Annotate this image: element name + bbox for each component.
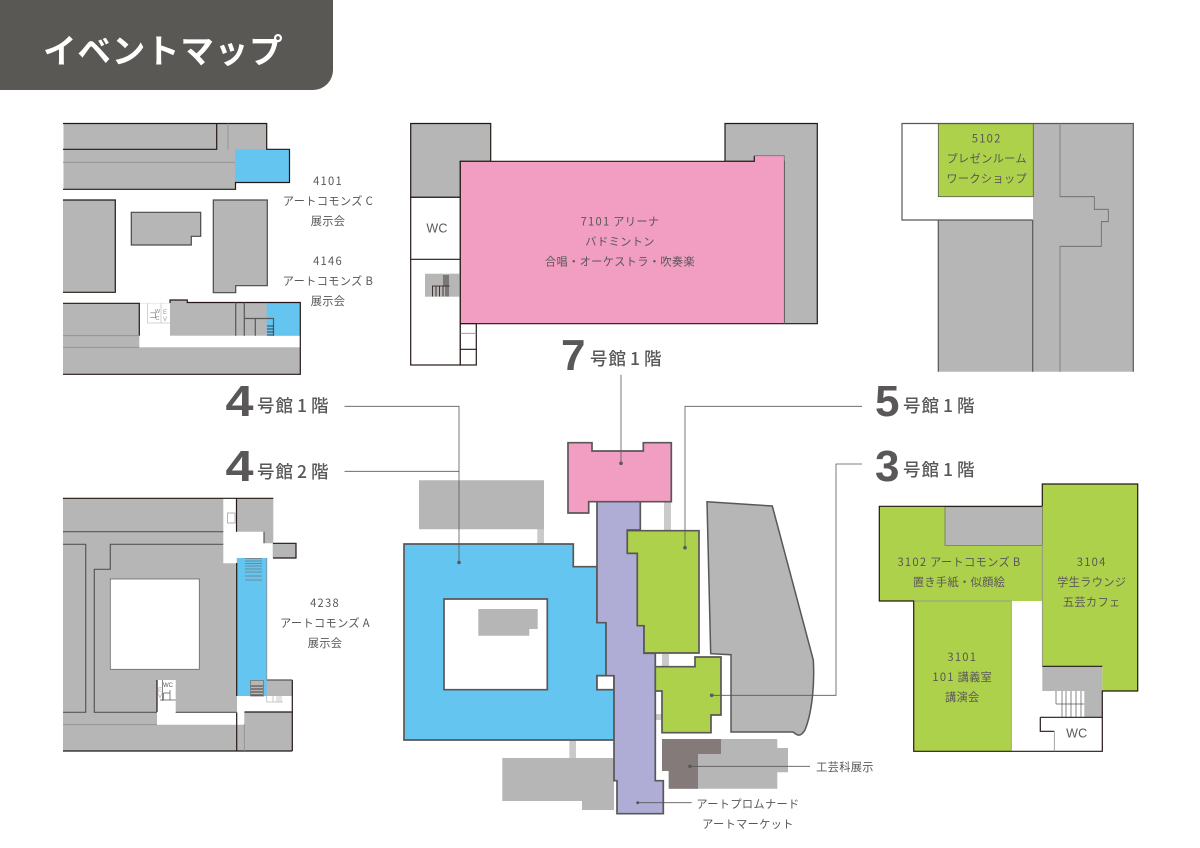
room labels: 4101 and 4146: 展示会 [311, 293, 345, 309]
room label: 5102 [946, 130, 1027, 186]
purple promenade [597, 502, 663, 814]
leader line: building 4 [344, 406, 461, 564]
floor plan: building 4 floor 1: V [163, 317, 167, 323]
room label: 3102: 3102 アートコモンズ B [897, 554, 1021, 570]
floor plan: building 4 floor 2 [63, 498, 296, 751]
room labels: 4101 and 4146: アートコモンズ C [283, 193, 373, 209]
room label: 3102: 置き手紙・似顔絵 [913, 574, 1005, 590]
room label: 4238: 4238 [310, 595, 340, 611]
callout: craft exhibit: 工芸科展示 [816, 759, 874, 775]
room labels: 4101 and 4146 [283, 173, 373, 309]
floor plan: building 4 floor 1 [63, 124, 300, 374]
room labels: 4101 and 4146: 4101 [313, 173, 343, 189]
heading: building 5 floor 1 [875, 377, 975, 426]
heading: building 7 floor 1: 号館1階 [590, 346, 662, 371]
room label: 3101 [932, 649, 992, 705]
callout: craft exhibit [688, 759, 874, 775]
heading: building 5 floor 1: 号館1階 [903, 393, 975, 418]
heading: building 4 floor 2 [226, 442, 329, 491]
floor plan: building 4 floor 1: C [156, 316, 160, 322]
room label: 3101: 101 講義室 [932, 669, 992, 685]
room label: 5102: 5102 [972, 130, 1002, 146]
floor plan: building 4 floor 1: W [155, 309, 161, 315]
room label: 3104 [1057, 554, 1126, 610]
pink building 7 [568, 443, 671, 513]
room labels: 4101 and 4146: 展示会 [311, 213, 345, 229]
heading: building 4 floor 1: 4 [226, 377, 254, 426]
room label: 3101: 3101 [947, 649, 977, 665]
floor plan: building 4 floor 2: E [158, 688, 162, 694]
green building 3 [655, 657, 721, 733]
title banner [0, 0, 333, 90]
floor plan: building 4 floor 1: E [163, 310, 167, 316]
room labels: 4101 and 4146: アートコモンズ B [283, 273, 373, 289]
room labels: 4101 and 4146: 4146 [313, 253, 343, 269]
room label: 5102: プレゼンルーム [946, 150, 1027, 166]
floor plan: building 3 floor 1 [879, 484, 1138, 751]
craft exhibit area [662, 739, 721, 789]
room label: 7101: 7101 アリーナ [581, 214, 659, 230]
campus site map [404, 443, 814, 814]
room label: 4238: 展示会 [308, 635, 342, 651]
room label: 3104: 五芸カフェ [1063, 594, 1121, 610]
title banner: イベントマップ [43, 24, 283, 73]
blue building 4 [404, 544, 614, 740]
heading: building 3 floor 1 [875, 442, 975, 491]
floor plan: building 7 floor 1: WC [426, 222, 448, 236]
heading: building 4 floor 2: 4 [226, 442, 254, 491]
room label: 7101: 合唱・オーケストラ・吹奏楽 [545, 254, 695, 270]
callout: art promenade: アートプロムナード [696, 796, 800, 812]
floor plan: building 3 floor 1: WC [1066, 726, 1087, 740]
room label: 4238 [280, 595, 370, 651]
floor plan: building 4 floor 1: コ [149, 311, 157, 320]
heading: building 3 floor 1: 3 [875, 442, 899, 491]
leader line: building 7 [619, 375, 623, 465]
surrounding grey buildings [419, 480, 788, 810]
green building 5 [627, 531, 699, 653]
heading: building 4 floor 2: 号館2階 [257, 459, 329, 484]
room label: 7101 [545, 214, 695, 270]
room label: 3104: 学生ラウンジ [1057, 574, 1126, 590]
heading: building 3 floor 1: 号館1階 [903, 457, 975, 482]
room label: 3101: 講演会 [945, 689, 980, 705]
floor plan: building 4 floor 2: WC [163, 683, 174, 689]
callout: art promenade: アートマーケット [702, 816, 794, 832]
heading: building 7 floor 1: 7 [561, 331, 585, 380]
callout: art promenade [636, 796, 800, 832]
connectors [537, 501, 671, 758]
room label: 3102 [897, 554, 1021, 590]
heading: building 4 floor 1: 号館1階 [257, 393, 329, 418]
room label: 7101: バドミントン [585, 234, 655, 250]
floor plan: building 7 floor 1 [411, 124, 817, 365]
room label: 4238: アートコモンズ A [280, 615, 370, 631]
heading: building 4 floor 1 [226, 377, 329, 426]
floor plan: building 4 floor 2: V [158, 694, 162, 700]
leader line: building 3 [710, 464, 862, 697]
room label: 3104: 3104 [1077, 554, 1107, 570]
floor plan: building 5 floor 1 [902, 124, 1133, 372]
heading: building 5 floor 1: 5 [875, 377, 899, 426]
leader line: building 5 [683, 406, 862, 550]
room label: 5102: ワークショップ [946, 170, 1027, 186]
heading: building 7 floor 1 [561, 331, 662, 380]
